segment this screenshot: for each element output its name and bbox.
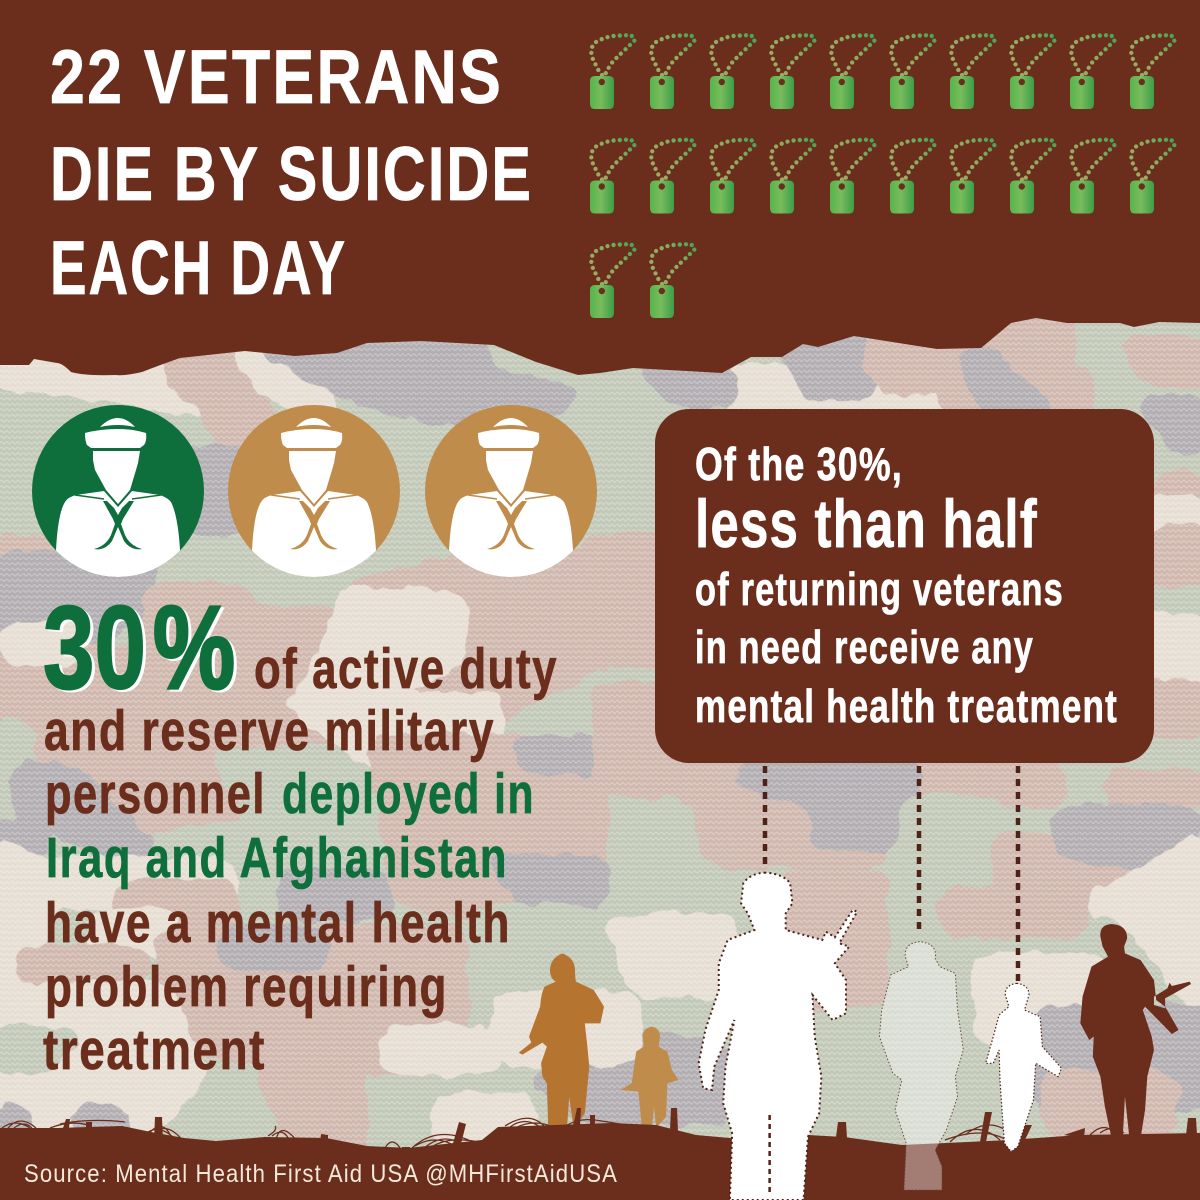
- callout text: less than half: [695, 486, 1038, 562]
- text block: active duty statement: [43, 637, 558, 1082]
- icon: tan sailor 2: [425, 405, 597, 591]
- callout box: [655, 409, 1154, 763]
- soldier: small white highlighted: [986, 983, 1062, 1152]
- icon: green sailor: [32, 405, 204, 591]
- callout text: of returning veterans: [695, 563, 1064, 615]
- text block: active duty statement: deployed in: [282, 762, 535, 826]
- text block: active duty statement: Iraq and Afghanistan: [46, 826, 508, 890]
- text block: active duty statement: have a mental health: [45, 891, 511, 955]
- callout text: in need receive any: [695, 621, 1034, 673]
- title: DIE BY SUICIDE: [50, 132, 533, 217]
- dog tag pictogram: 22 tags: [590, 35, 1175, 318]
- title: 22 VETERANS: [50, 35, 503, 120]
- text block: active duty statement: problem requiring: [45, 955, 448, 1019]
- statistic: 30%: 30: [46, 584, 149, 716]
- soldier: small tan: [621, 1027, 679, 1128]
- soldier: faded ghost figure: [879, 942, 963, 1190]
- soldier: dark brown with rifle: [1080, 924, 1191, 1138]
- statistic: 30%: %: [153, 582, 235, 714]
- title: EACH DAY: [50, 226, 347, 311]
- callout text: [695, 438, 1118, 732]
- statistic: 30%: 30: [43, 582, 146, 714]
- statistic: 30%: [43, 582, 238, 716]
- soldier: large white highlighted: [699, 873, 857, 1200]
- text block: active duty statement: personnel: [45, 762, 266, 826]
- dotted connector lines: [765, 766, 1018, 981]
- top brown panel: [0, 0, 1200, 375]
- soldier: tan with rifle: [519, 953, 604, 1128]
- text block: active duty statement: treatment: [43, 1018, 266, 1082]
- title: [50, 35, 533, 311]
- callout text: Of the 30%,: [695, 438, 903, 490]
- source line: Source: Mental Health First Aid USA @MHFirstAidUSA: [24, 1160, 618, 1188]
- ground and source band: [0, 1123, 1200, 1200]
- text block: active duty statement: of active duty: [254, 637, 558, 701]
- barbed wire and fence posts: [2, 1108, 1197, 1150]
- icon: tan sailor 1: [228, 405, 400, 591]
- statistic: 30%: %: [156, 584, 238, 716]
- text block: active duty statement: and reserve military: [44, 699, 495, 763]
